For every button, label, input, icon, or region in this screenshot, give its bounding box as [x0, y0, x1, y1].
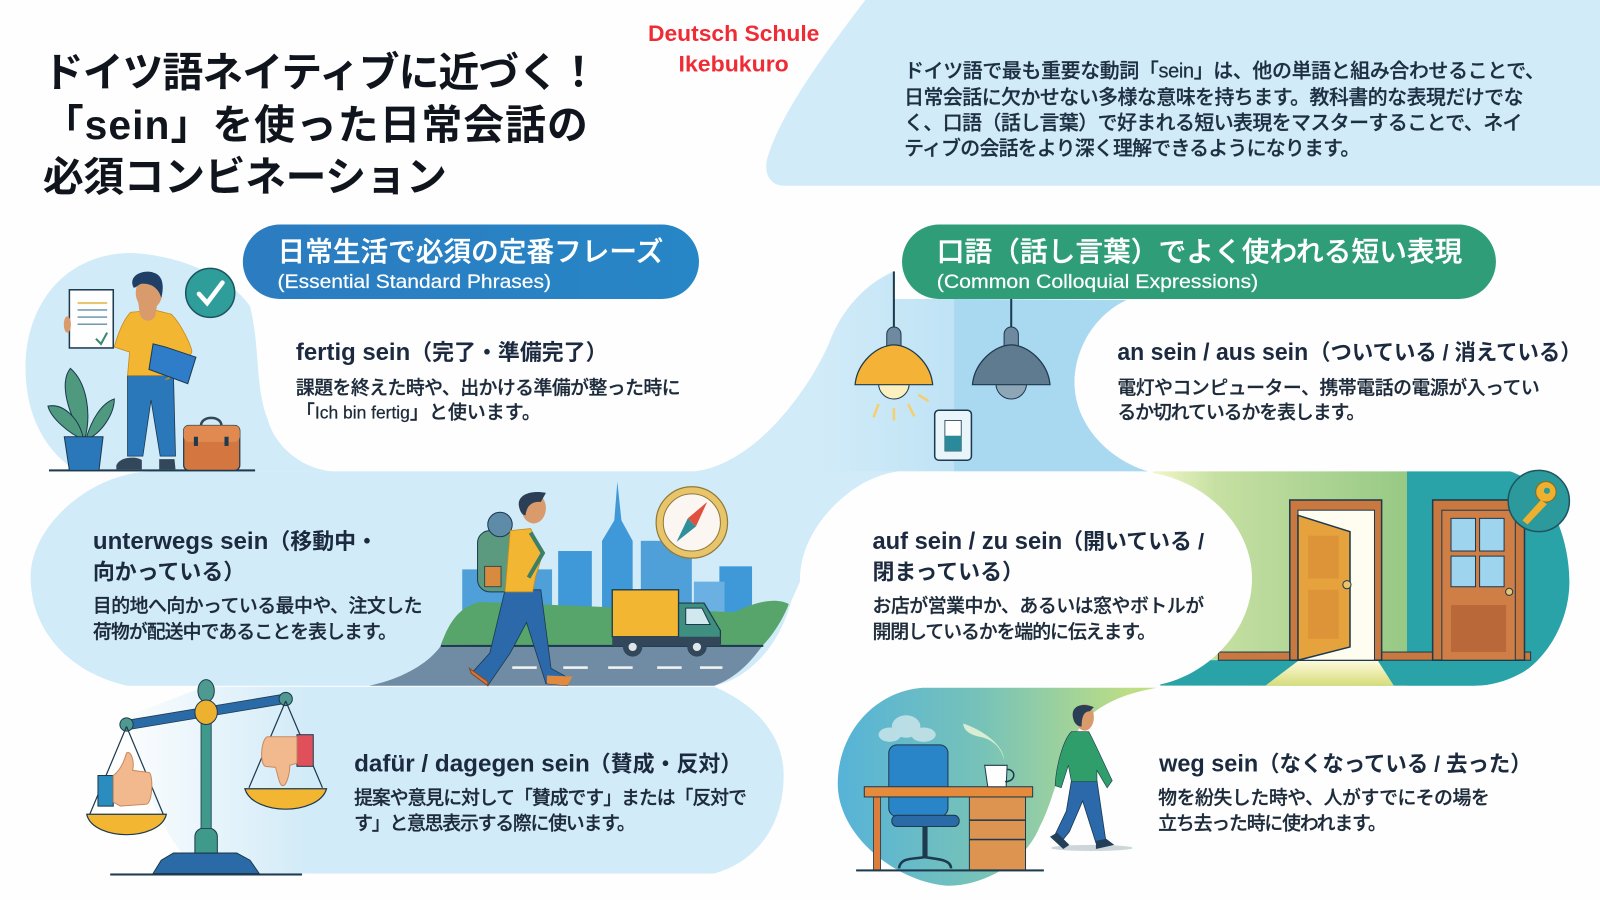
- text: weg sein: [1158, 750, 1532, 834]
- intro text: く、口語（話し言葉）で好まれる短い表現をマスターすることで、ネイ: [904, 113, 1522, 135]
- panel: fertig sein illustration background: [26, 253, 337, 471]
- panel: dafür sein background: [133, 687, 784, 873]
- panel: white card auf sein: [800, 471, 1252, 686]
- text: auf sein zu sein: 閉まっている）: [872, 560, 1024, 585]
- intro text: ティブの会話をより深く理解できるようになります。: [904, 137, 1360, 160]
- heading: essential standard phrases: (Essential Standard Phrases): [278, 271, 551, 293]
- text: unterwegs sein: unterwegs sein: [93, 528, 268, 555]
- text: dafür dagegen sein: [354, 750, 747, 834]
- text: weg sein: weg sein: [1158, 750, 1258, 777]
- text: fertig sein: 「Ich bin fertig」と使います。: [296, 401, 541, 422]
- title: ドイツ語ネイティブに近づく！: [43, 50, 599, 96]
- text: unterwegs sein: 目的地へ向かっている最中や、注文した: [93, 595, 422, 616]
- text: dafür dagegen sein: 提案や意見に対して「賛成です」または「反対で: [354, 787, 747, 808]
- text: an sein aus sein: （ついている / 消えている）: [1309, 340, 1582, 365]
- text: auf sein zu sein: 開閉しているかを端的に伝えます。: [872, 621, 1156, 642]
- title: 必須コンビネーション: [43, 154, 447, 200]
- text: an sein aus sein: 電灯やコンピューター、携帯電話の電源が入ってい: [1117, 377, 1540, 398]
- text: weg sein: 物を紛失した時や、人がすでにその場を: [1158, 787, 1490, 808]
- text: unterwegs sein: （移動中・: [268, 529, 378, 554]
- text: fertig sein: （完了・準備完了）: [410, 340, 608, 365]
- panel: weg sein illustration background: [838, 688, 1157, 886]
- intro text: [904, 61, 1545, 160]
- heading: common colloquial expressions: [902, 224, 1496, 299]
- heading: common colloquial expressions: 口語（話し言葉）でよく使われる短い表現: [937, 236, 1462, 267]
- title: 「sein」を使った日常会話の: [43, 102, 588, 148]
- text: dafür dagegen sein: す」と意思表示する際に使います。: [354, 813, 636, 834]
- title: [43, 50, 599, 200]
- school name: [648, 21, 819, 76]
- illustration: open and closed doors: [1160, 470, 1579, 686]
- text: an sein aus sein: [1117, 339, 1582, 422]
- school name: Deutsch Schule: [648, 21, 819, 46]
- text: weg sein: （なくなっている / 去った）: [1258, 751, 1532, 776]
- illustration: balance scale with thumbs: [87, 680, 327, 876]
- school name: Ikebukuro: [679, 51, 789, 76]
- illustration: traveller, city, truck and compass: [369, 482, 789, 686]
- illustration: empty desk and person walking away: [856, 704, 1133, 871]
- text: weg sein: 立ち去った時に使われます。: [1158, 813, 1387, 834]
- intro text: 日常会話に欠かせない多様な意味を持ちます。教科書的な表現だけでな: [904, 86, 1523, 109]
- heading: common colloquial expressions: (Common Colloquial Expressions): [937, 271, 1258, 293]
- illustration: lamps and wall switch: [855, 271, 1050, 460]
- text: auf sein zu sein: auf sein / zu sein: [872, 528, 1062, 555]
- text: auf sein zu sein: お店が営業中か、あるいは窓やボトルが: [872, 595, 1204, 616]
- panel: unterwegs sein and lamp background: [31, 271, 1148, 686]
- text: auf sein zu sein: [872, 528, 1204, 642]
- text: an sein aus sein: るか切れているかを表します。: [1117, 401, 1365, 422]
- text: unterwegs sein: [93, 528, 422, 642]
- text: dafür dagegen sein: dafür / dagegen sein: [354, 750, 590, 777]
- text: dafür dagegen sein: （賛成・反対）: [589, 751, 742, 776]
- text: unterwegs sein: 向かっている）: [93, 560, 245, 585]
- text: fertig sein: fertig sein: [296, 339, 410, 366]
- heading: essential standard phrases: [243, 224, 699, 299]
- text: fertig sein: [296, 339, 681, 422]
- text: fertig sein: 課題を終えた時や、出かける準備が整った時に: [296, 377, 681, 398]
- text: auf sein zu sein: （開いている /: [1061, 529, 1204, 554]
- panel: lamp illustration background: [776, 271, 1148, 471]
- intro text: ドイツ語で最も重要な動詞「sein」は、他の単語と組み合わせることで、: [904, 61, 1545, 83]
- panel: intro background: [766, 0, 1600, 186]
- heading: essential standard phrases: 日常生活で必須の定番フレーズ: [278, 236, 663, 267]
- text: an sein aus sein: an sein / aus sein: [1117, 339, 1308, 366]
- panel: door illustration background: [1153, 471, 1569, 686]
- illustration: person with document: [48, 268, 255, 471]
- text: unterwegs sein: 荷物が配送中であることを表します。: [93, 621, 397, 642]
